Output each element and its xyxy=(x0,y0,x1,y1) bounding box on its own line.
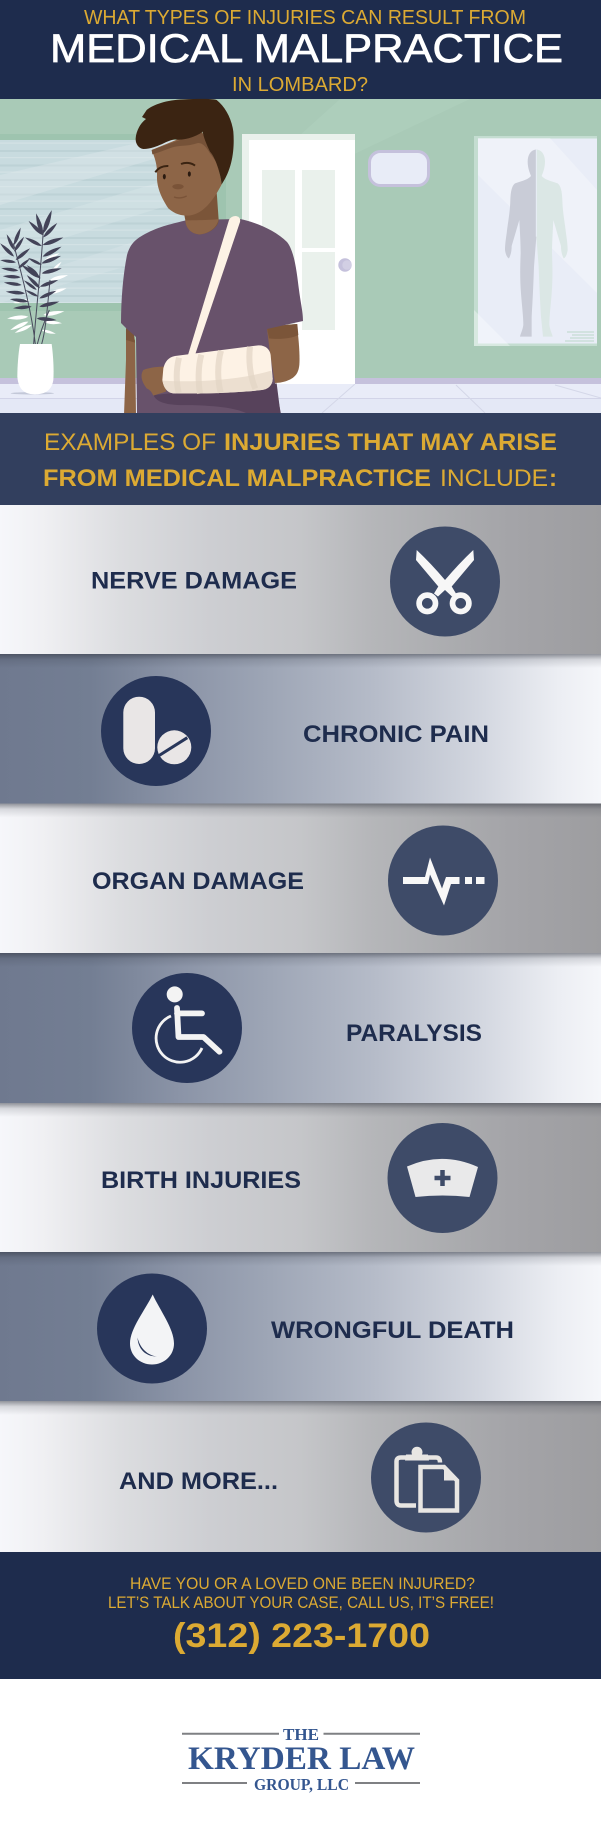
body silhouette xyxy=(505,149,568,337)
arm: viewer left xyxy=(124,328,136,415)
icon: pills xyxy=(101,676,211,786)
floor xyxy=(0,378,601,414)
phone number: (312) 223-1700 xyxy=(173,1617,430,1655)
pale leaves xyxy=(7,252,68,335)
footer call to action: LET’S TALK ABOUT YOUR CASE, CALL US, IT’S FREE! xyxy=(108,1593,494,1612)
icon: scissors xyxy=(390,526,500,636)
band: examples heading xyxy=(0,413,601,506)
row: chronic pain xyxy=(0,654,601,804)
stems xyxy=(13,230,50,344)
wall light xyxy=(370,152,428,186)
shirt xyxy=(121,219,303,414)
icon: clipboard and document xyxy=(371,1422,481,1532)
icon: pulse line xyxy=(388,826,498,936)
pot xyxy=(11,344,54,394)
eyes and brows xyxy=(155,163,195,179)
row: nerve damage: NERVE DAMAGE xyxy=(91,568,297,594)
head xyxy=(136,99,234,234)
anatomy poster xyxy=(474,136,597,346)
row: organ damage: ORGAN DAMAGE xyxy=(92,868,304,895)
law firm logo: THE xyxy=(283,1725,319,1744)
nose and mouth xyxy=(172,184,187,198)
illustration: clinic room scene xyxy=(0,99,601,415)
door xyxy=(242,134,355,384)
icon: nurse cap xyxy=(388,1123,498,1233)
band: examples heading: : xyxy=(549,465,557,492)
row: chronic pain: CHRONIC PAIN xyxy=(303,721,489,748)
row: birth injuries xyxy=(0,1103,601,1252)
row: wrongful death xyxy=(0,1252,601,1401)
band: examples heading: INJURIES THAT MAY ARISE xyxy=(224,429,557,456)
row: and more: AND MORE... xyxy=(119,1468,278,1495)
law firm logo: KRYDER LAW xyxy=(188,1741,415,1777)
law firm logo xyxy=(182,1725,420,1794)
header line one: WHAT TYPES OF INJURIES CAN RESULT FROM xyxy=(84,7,526,29)
band: examples heading: INCLUDE xyxy=(440,465,548,492)
row: and more xyxy=(0,1401,601,1552)
man with arm in a sling xyxy=(121,99,303,415)
sling strap xyxy=(188,216,240,355)
hair xyxy=(136,99,234,184)
row: wrongful death: WRONGFUL DEATH xyxy=(271,1317,514,1344)
header line three: IN LOMBARD? xyxy=(232,74,368,96)
row: paralysis: PARALYSIS xyxy=(346,1020,482,1047)
icon: blood drop xyxy=(97,1274,207,1384)
row: paralysis xyxy=(0,953,601,1103)
window with blinds xyxy=(0,134,226,311)
main title: MEDICAL MALPRACTICE xyxy=(50,27,563,71)
band: examples heading: EXAMPLES OF xyxy=(44,429,216,456)
cast and hand xyxy=(142,345,281,415)
footer call to action: HAVE YOU OR A LOVED ONE BEEN INJURED? xyxy=(130,1574,475,1593)
face xyxy=(152,132,222,216)
row: nerve damage xyxy=(0,505,601,654)
plant in white pot xyxy=(0,209,68,394)
neck xyxy=(183,192,219,234)
band: examples heading: FROM MEDICAL MALPRACTICE xyxy=(43,465,431,492)
icon: wheelchair xyxy=(132,973,242,1083)
dark leaves xyxy=(0,209,64,322)
header banner xyxy=(0,0,601,100)
law firm logo: GROUP, LLC xyxy=(254,1775,349,1794)
footer call to action xyxy=(0,1552,601,1679)
row: organ damage xyxy=(0,804,601,953)
row: birth injuries: BIRTH INJURIES xyxy=(101,1167,301,1194)
arm: viewer right xyxy=(267,324,300,383)
